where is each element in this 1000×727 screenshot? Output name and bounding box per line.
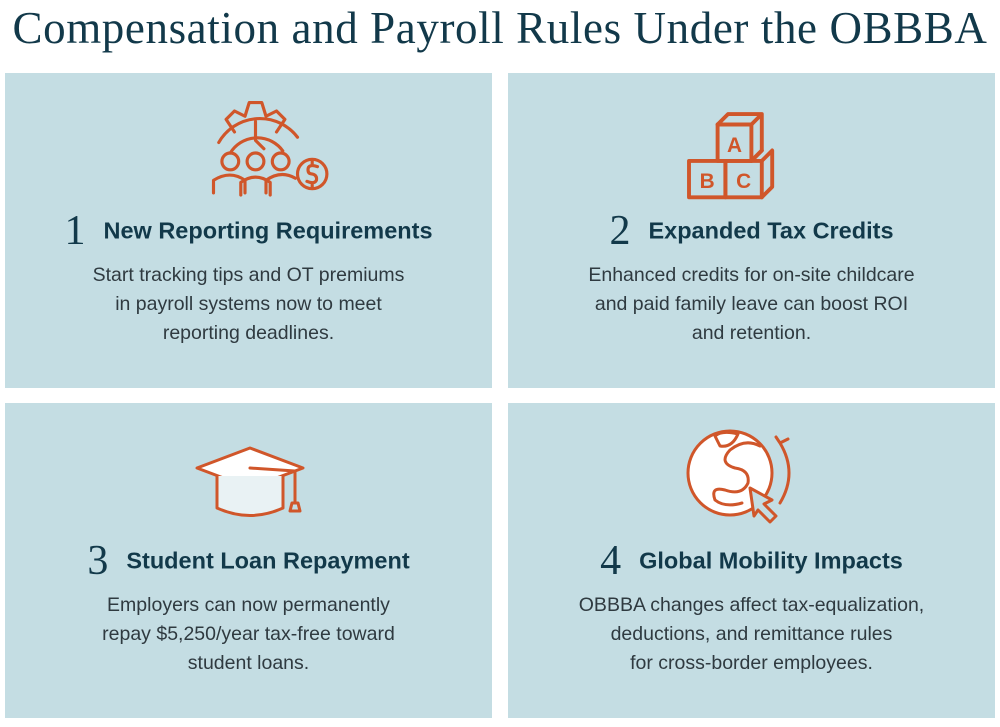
icon: globe with cursor	[686, 430, 790, 524]
text 2: Enhanced credits for on-site childcare	[588, 264, 915, 286]
text 1: reporting deadlines.	[163, 322, 334, 344]
heading 1: 1 New Reporting Requirements	[64, 208, 433, 254]
text 4: for cross-border employees.	[630, 652, 873, 674]
text 1: in payroll systems now to meet	[115, 293, 382, 315]
heading 3: 3 Student Loan Repayment	[87, 538, 410, 584]
icon: ABC blocks: A	[727, 134, 742, 157]
text 4: deductions, and remittance rules	[611, 623, 892, 645]
icon: gear clock people dollar	[212, 101, 328, 197]
heading 4: 4 Global Mobility Impacts	[600, 538, 903, 584]
icon: ABC blocks: B	[700, 170, 715, 193]
text 2: and paid family leave can boost ROI	[595, 293, 908, 315]
text 3	[102, 594, 395, 674]
title: Compensation and Payroll Rules Under the OBBBA	[12, 3, 988, 53]
panel: global mobility impacts	[508, 403, 995, 718]
text 4: OBBBA changes affect tax-equalization,	[579, 594, 924, 616]
panel: new reporting requirements	[5, 73, 492, 388]
text 3: student loans.	[188, 652, 309, 674]
text 1	[93, 264, 404, 344]
icon: graduation cap	[196, 446, 304, 517]
text 4	[579, 594, 924, 674]
text 3: repay $5,250/year tax-free toward	[102, 623, 395, 645]
text 3: Employers can now permanently	[107, 594, 390, 616]
panel: expanded tax credits	[508, 73, 995, 388]
icon: ABC blocks	[687, 112, 774, 200]
icon: ABC blocks: C	[736, 170, 751, 193]
panel: student loan repayment	[5, 403, 492, 718]
text 2: and retention.	[692, 322, 811, 344]
heading 2: 2 Expanded Tax Credits	[609, 208, 894, 254]
text 2	[588, 264, 915, 344]
text 1: Start tracking tips and OT premiums	[93, 264, 404, 286]
